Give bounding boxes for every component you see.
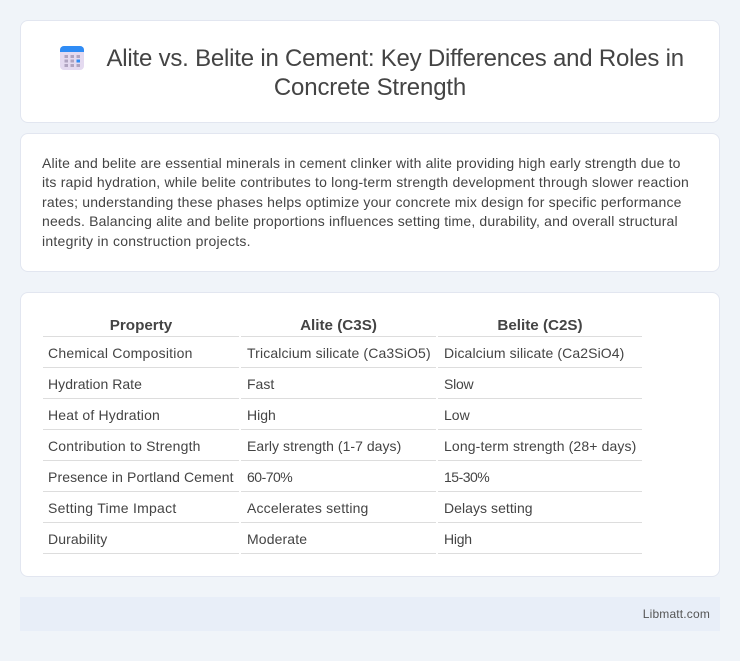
intro text: needs. Balancing alite and belite proportions influences setting time, durability, and overall structural <box>42 213 678 229</box>
row: presence in portland cement: 60-70% <box>247 469 292 485</box>
row: durability: Durability <box>48 531 107 547</box>
row: durability <box>48 531 472 547</box>
intro text: rates; understanding these phases helps optimize your concrete mix design for specific performance <box>42 194 682 210</box>
row: presence in portland cement <box>48 469 490 485</box>
row: setting time impact <box>48 500 533 516</box>
row: chemical composition: Dicalcium silicate (Ca2SiO4) <box>444 345 624 361</box>
row: setting time impact: Setting Time Impact <box>48 500 176 516</box>
column headers: Property <box>110 317 172 334</box>
row: contribution to strength: Contribution to Strength <box>48 438 201 454</box>
footer text: Libmatt.com: Libmatt.com <box>643 607 710 621</box>
row: chemical composition: Tricalcium silicate (Ca3SiO5) <box>247 345 431 361</box>
row: heat of hydration <box>48 407 470 423</box>
title: Alite vs. Belite in Cement: Key Differences and Roles in <box>106 45 684 72</box>
row: hydration rate: Fast <box>247 376 274 392</box>
row: setting time impact: Accelerates setting <box>247 500 369 516</box>
row: chemical composition: Chemical Composition <box>48 345 193 361</box>
row: hydration rate: Hydration Rate <box>48 376 142 392</box>
row: heat of hydration: High <box>247 407 276 423</box>
intro text: Alite and belite are essential minerals in cement clinker with alite providing high early strength due to <box>42 155 681 171</box>
row: contribution to strength: Long-term strength (28+ days) <box>444 438 636 454</box>
table panel <box>20 292 720 577</box>
column headers: Belite (C2S) <box>497 317 583 334</box>
title panel <box>20 20 720 123</box>
column headers: Alite (C3S) <box>300 317 377 334</box>
row: presence in portland cement: Presence in Portland Cement <box>48 469 234 485</box>
title: Concrete Strength <box>274 74 466 101</box>
icon: calendar <box>60 46 84 70</box>
row: durability: High <box>444 531 472 547</box>
comparison table <box>43 317 642 554</box>
row: presence in portland cement: 15-30% <box>444 469 489 485</box>
intro text: its rapid hydration, while belite contributes to long-term strength development through slower reaction <box>42 174 689 190</box>
intro text <box>42 155 689 249</box>
intro panel <box>20 133 720 272</box>
row: contribution to strength: Early strength (1-7 days) <box>247 438 401 454</box>
row: setting time impact: Delays setting <box>444 500 533 516</box>
column headers <box>110 317 583 334</box>
footer bar <box>20 597 720 631</box>
row: durability: Moderate <box>247 531 307 547</box>
row: heat of hydration: Low <box>444 407 470 423</box>
row: hydration rate <box>48 376 474 392</box>
title <box>106 45 684 101</box>
row: hydration rate: Slow <box>444 376 473 392</box>
intro text: integrity in construction projects. <box>42 233 251 249</box>
row: chemical composition <box>48 345 624 361</box>
row: heat of hydration: Heat of Hydration <box>48 407 160 423</box>
row: contribution to strength <box>48 438 636 454</box>
